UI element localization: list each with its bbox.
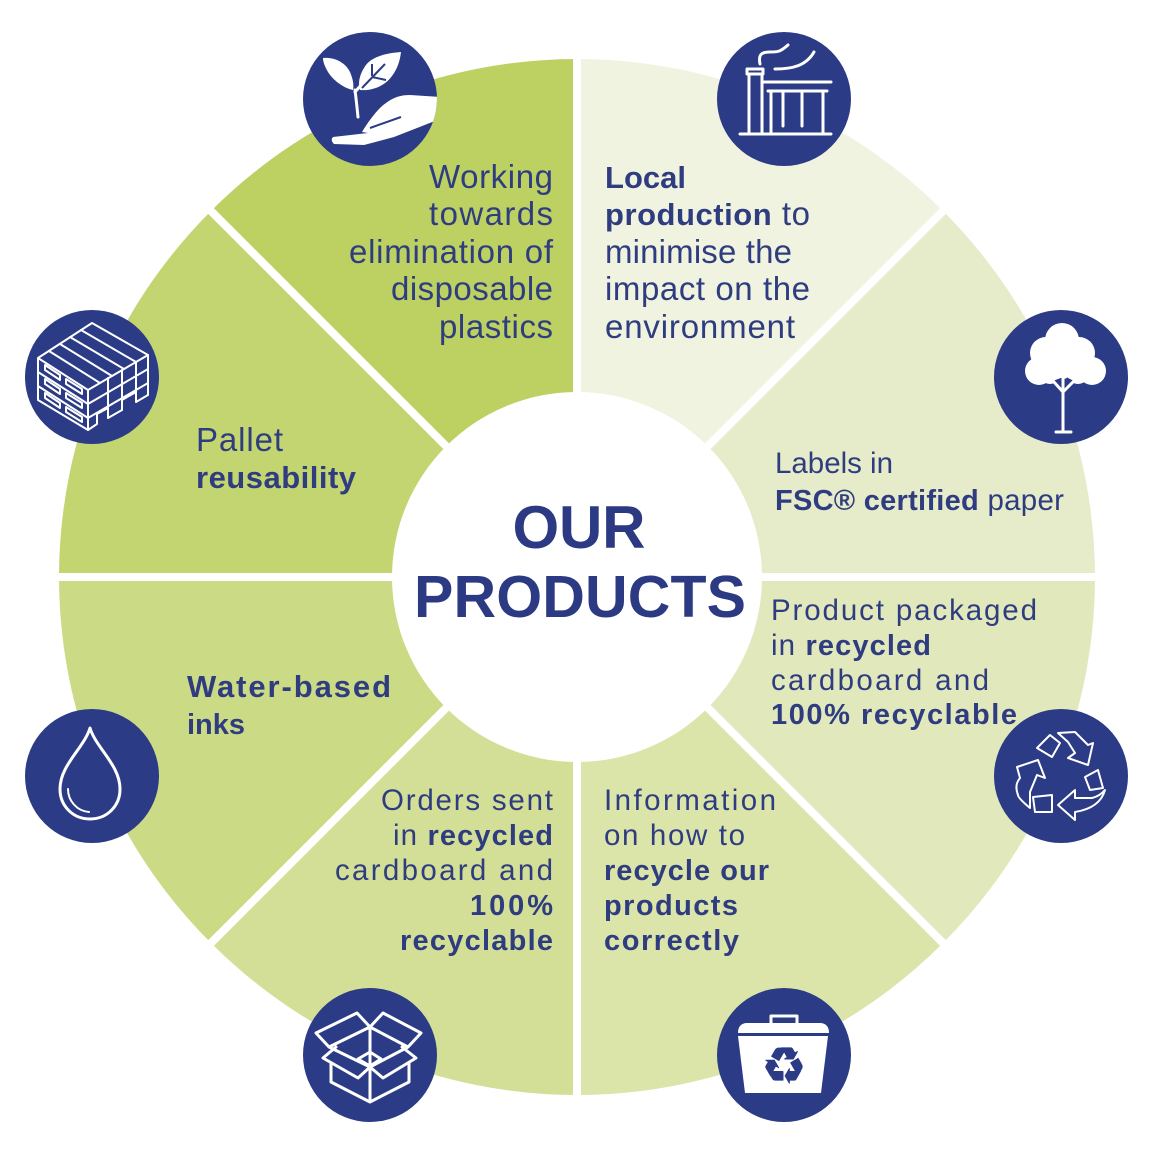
text: working towards elimination: disposable xyxy=(391,270,553,307)
title: OUR xyxy=(512,494,646,561)
wedge xyxy=(577,577,943,1095)
wedge xyxy=(577,211,1095,577)
text: information on recycling: correctly xyxy=(604,925,739,957)
text: information on recycling: on how to xyxy=(604,819,745,852)
text: working towards elimination: plastics xyxy=(439,308,553,345)
wedge xyxy=(59,577,577,943)
icon: water drop xyxy=(25,709,159,843)
text: working towards elimination: towards xyxy=(429,195,553,232)
text: pallet reusability: Pallet xyxy=(196,421,283,458)
text: local production: impact on the xyxy=(605,270,810,307)
title xyxy=(414,494,746,630)
text: information on recycling: recycle our xyxy=(604,855,769,887)
icon: recycling arrows xyxy=(994,709,1128,843)
icon: factory xyxy=(717,32,851,166)
text: local production xyxy=(605,160,810,345)
text: local production: environment xyxy=(605,308,795,345)
wedge xyxy=(59,211,577,577)
text: local production: Local xyxy=(605,160,686,195)
text: FSC labels: FSC® certified paper xyxy=(775,484,1064,517)
panel: pallet reusability xyxy=(25,211,577,577)
text: working towards elimination: elimination of xyxy=(349,233,554,270)
icon: stacked pallets xyxy=(25,310,159,444)
panel: labels in FSC certified paper xyxy=(577,211,1128,577)
wedge xyxy=(211,59,577,577)
wedge xyxy=(577,577,1095,943)
icon: recycling bin xyxy=(717,988,851,1122)
icon: plant in hand xyxy=(303,32,440,166)
text: orders sent: in recycled xyxy=(393,819,553,852)
wedge xyxy=(211,577,577,1095)
text: orders sent xyxy=(335,784,553,957)
centre circle with title xyxy=(392,392,762,762)
panel: orders sent in recycled cardboard xyxy=(211,577,577,1122)
text: local production: production to xyxy=(605,195,810,232)
text: product packaged: 100% recyclable xyxy=(771,699,1017,731)
text: product packaged: in recycled xyxy=(771,629,931,662)
text: FSC labels xyxy=(775,447,1064,517)
text: FSC labels: Labels in xyxy=(775,447,893,480)
icon: tree xyxy=(994,310,1128,444)
text: water-based inks: Water-based xyxy=(187,669,391,704)
icon: open box xyxy=(303,988,437,1122)
text: orders sent: cardboard and xyxy=(335,854,553,887)
panel: information on how to recycle xyxy=(577,577,943,1122)
text: information on recycling: Information xyxy=(604,784,776,817)
text: orders sent: recyclable xyxy=(400,925,553,957)
text: working towards elimination xyxy=(349,158,554,345)
text: pallet reusability: reusability xyxy=(196,460,357,495)
text: orders sent: Orders sent xyxy=(381,784,553,817)
text: product packaged: cardboard and xyxy=(771,664,989,697)
icon: recycling bin: ♻ xyxy=(762,1037,806,1095)
panel: water-based inks xyxy=(25,577,577,943)
text: pallet reusability xyxy=(196,421,357,495)
panel: product packaged in recycled cardboard xyxy=(577,577,1128,943)
text: orders sent: 100% xyxy=(470,890,553,922)
text: water-based inks xyxy=(187,669,391,741)
title: PRODUCTS xyxy=(414,564,746,630)
text: local production: minimise the xyxy=(605,233,792,270)
text: working towards elimination: Working xyxy=(429,158,553,195)
panel: local production xyxy=(577,32,943,577)
text: information on recycling: products xyxy=(604,890,738,922)
text: product packaged: Product packaged xyxy=(771,594,1037,627)
text: water-based inks: inks xyxy=(187,709,245,741)
panel: working towards elimination of disposable plastics xyxy=(214,32,573,444)
text: product packaged xyxy=(771,594,1037,731)
wedge xyxy=(577,59,943,577)
text: information on recycling xyxy=(604,784,776,957)
